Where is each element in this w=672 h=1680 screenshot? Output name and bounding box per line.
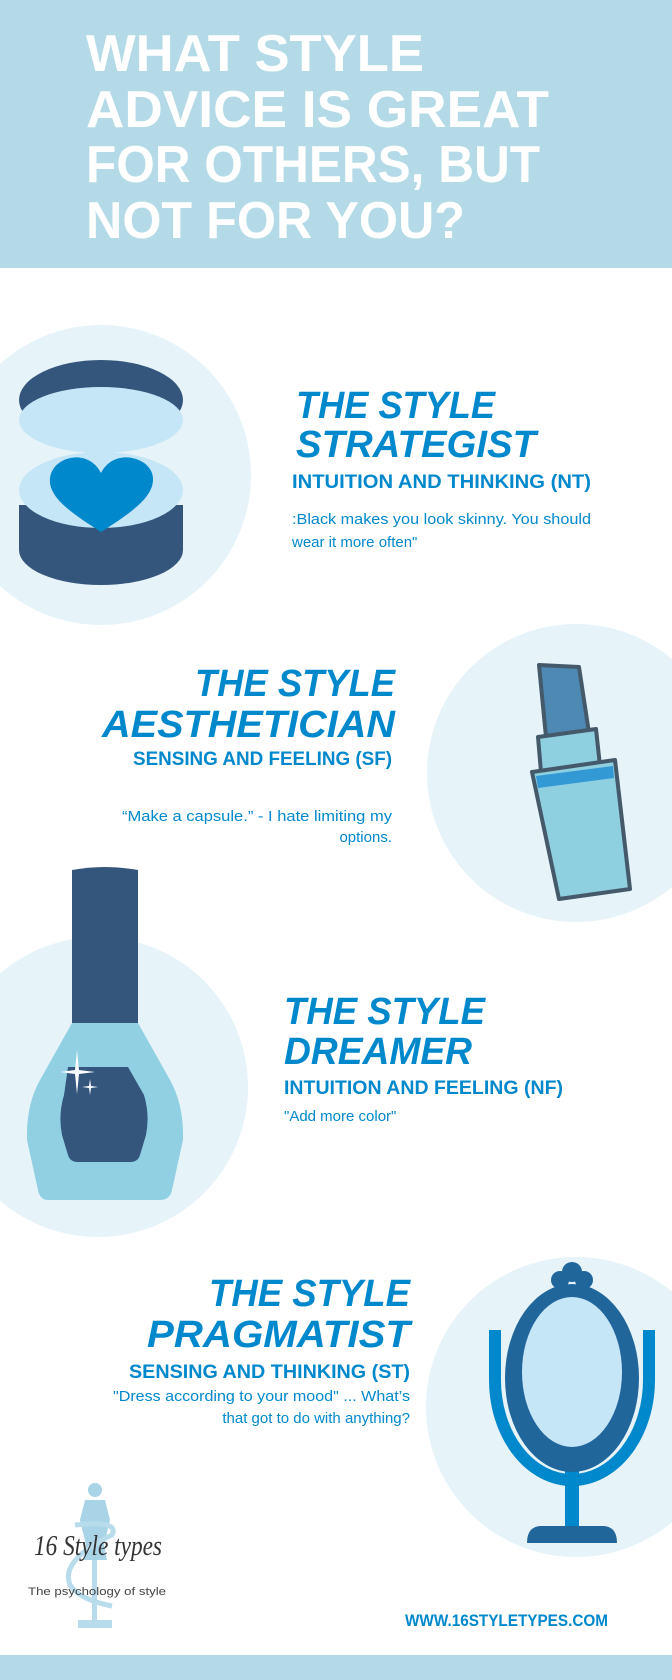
heading: aesthetician: AESTHETICIAN [101, 704, 397, 746]
heading: dreamer [284, 991, 563, 1125]
circle: pragmatist [426, 1257, 672, 1557]
heading: pragmatist [113, 1273, 413, 1427]
quote: NT: :Black makes you look skinny. You should [292, 511, 591, 528]
url: WWW.16STYLETYPES.COM [405, 1611, 608, 1630]
footer band [0, 1655, 672, 1680]
subtitle: SF: SENSING AND FEELING (SF) [133, 749, 392, 770]
heading: aesthetician: options. [339, 829, 392, 846]
title: NOT FOR YOU? [86, 192, 465, 250]
heading: strategist: wear it more often" [291, 534, 417, 551]
icon: mirror [495, 1262, 649, 1543]
title [86, 25, 549, 250]
quote: SF: “Make a capsule.” - I hate limiting my [122, 808, 393, 825]
heading: strategist: THE STYLE [296, 385, 497, 427]
circle: dreamer [0, 937, 248, 1237]
heading: dreamer: DREAMER [284, 1031, 473, 1073]
heading: aesthetician [101, 663, 397, 846]
heading: pragmatist: THE STYLE [209, 1273, 412, 1315]
circle: aesthetician [427, 624, 672, 922]
heading: aesthetician: THE STYLE [195, 663, 397, 705]
title: FOR OTHERS, BUT [86, 136, 540, 194]
header band [0, 0, 672, 268]
subtitle: ST: SENSING AND THINKING (ST) [129, 1362, 410, 1383]
heading: pragmatist: that got to do with anything? [222, 1410, 410, 1427]
logo: The psychology of style [28, 1586, 166, 1598]
title: ADVICE IS GREAT [86, 81, 549, 139]
title: WHAT STYLE [86, 25, 424, 83]
heading: strategist [291, 385, 591, 551]
logo [28, 1483, 166, 1628]
subtitle: NT: INTUITION AND THINKING (NT) [292, 472, 591, 493]
heading: dreamer: THE STYLE [284, 991, 487, 1033]
circle: strategist [0, 325, 251, 625]
quote: NF: "Add more color" [284, 1108, 396, 1125]
quote: ST: "Dress according to your mood" ... What’s [113, 1388, 410, 1405]
icon: compact [19, 360, 183, 585]
logo: 16 Style types [34, 1531, 162, 1562]
icon: nail polish [27, 867, 183, 1200]
heading: strategist: STRATEGIST [296, 424, 539, 466]
subtitle: NF: INTUITION AND FEELING (NF) [284, 1078, 563, 1099]
heading: pragmatist: PRAGMATIST [147, 1314, 413, 1356]
icon: lipstick [532, 665, 630, 899]
